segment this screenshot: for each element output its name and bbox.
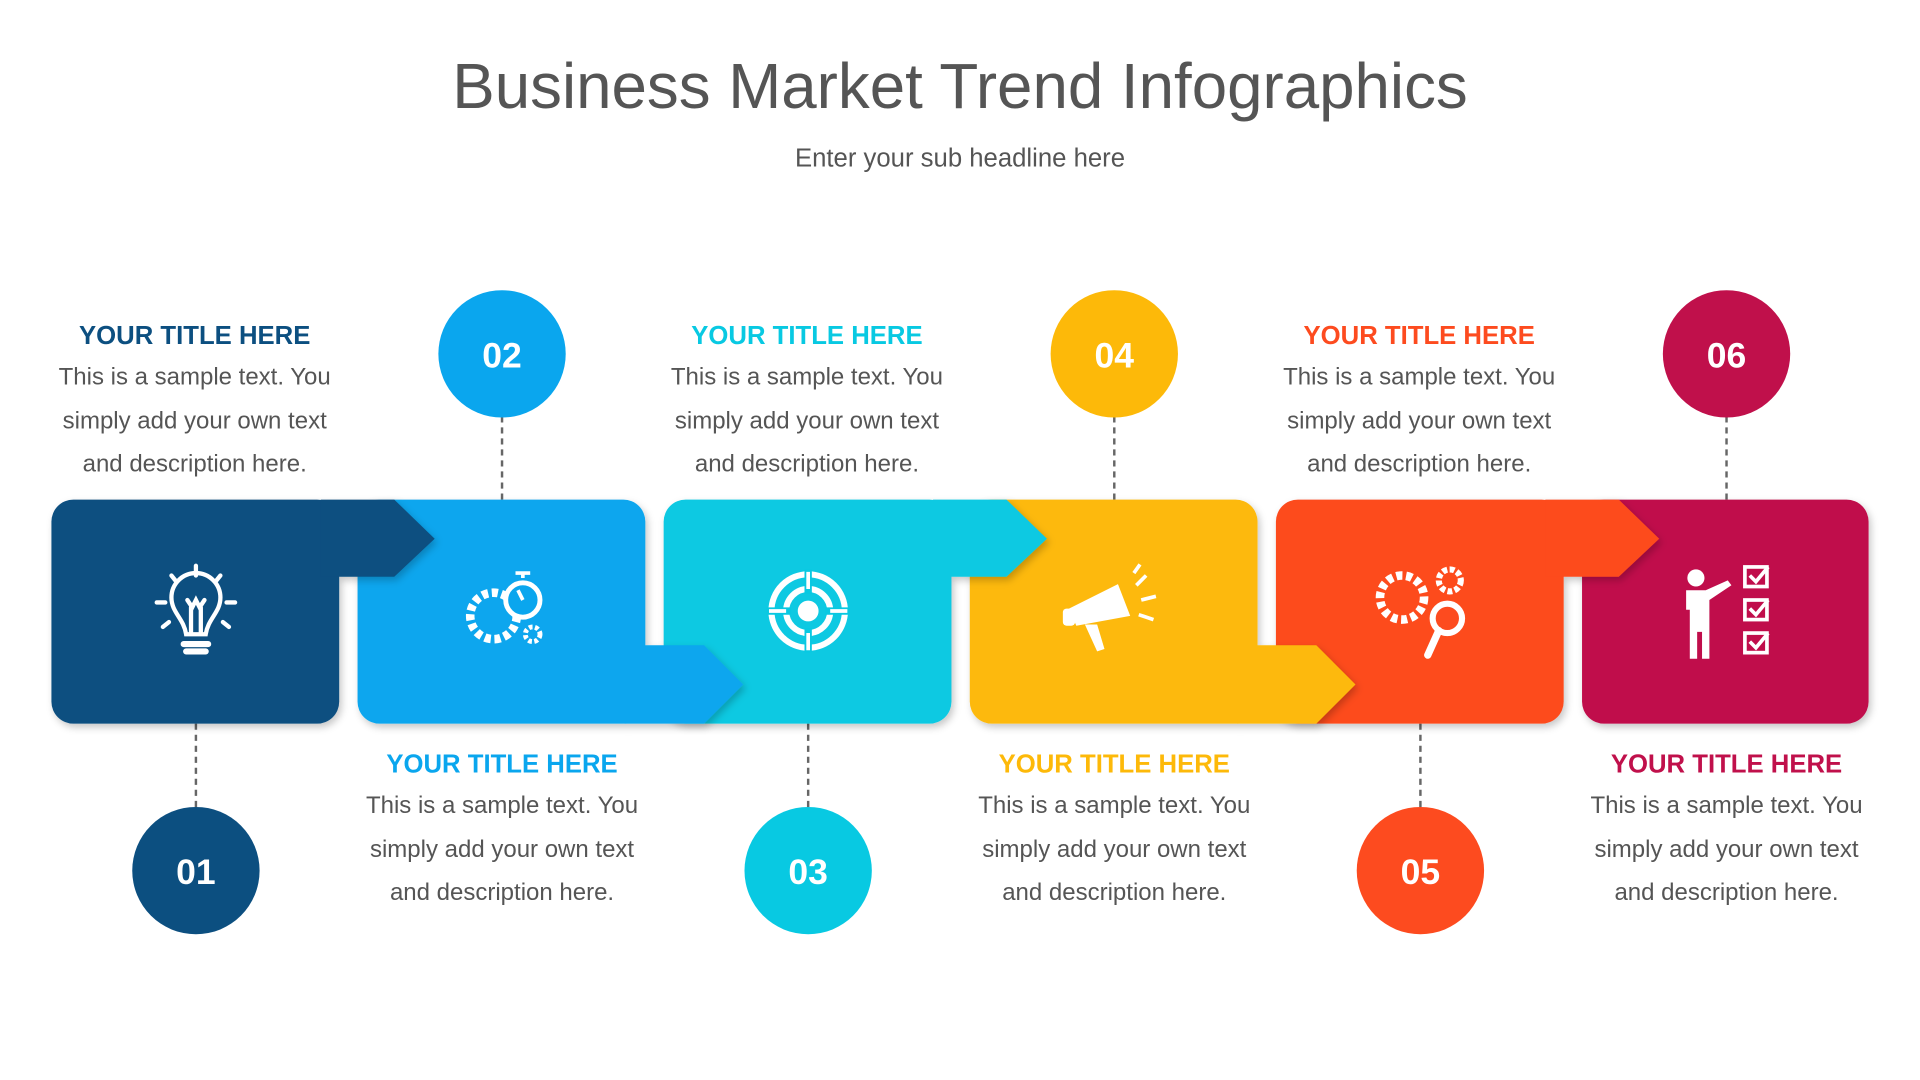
text block 5: and description here. [1307, 450, 1531, 477]
box 2 [358, 500, 743, 724]
text block 2: YOUR TITLE HERE [386, 751, 618, 779]
circle 04: 04 [1095, 335, 1134, 375]
text block 4: YOUR TITLE HERE [999, 751, 1230, 779]
box 1 [51, 500, 435, 724]
box 6 [1582, 500, 1869, 724]
text block 5 [1283, 322, 1555, 477]
circle 06: 06 [1707, 335, 1746, 375]
text block 3: simply add your own text [675, 408, 939, 435]
icon: gears stopwatch [470, 573, 540, 642]
text block 2: simply add your own text [370, 836, 634, 863]
text block 3: This is a sample text. You [671, 363, 943, 390]
box 4 [970, 500, 1356, 724]
text block 3 [671, 322, 943, 477]
icon: gears magnifier [1380, 569, 1462, 655]
text block 3: YOUR TITLE HERE [691, 322, 923, 350]
icon: person checklist [1686, 567, 1768, 659]
icon: light bulb [157, 566, 235, 651]
text block 6: and description here. [1614, 879, 1839, 906]
icon: megaphone [1063, 564, 1156, 651]
text block 3: and description here. [695, 450, 919, 477]
text block 5: simply add your own text [1287, 408, 1552, 435]
circle 02: 02 [482, 335, 522, 375]
circle 04 [1051, 290, 1178, 418]
text block 4: This is a sample text. You [978, 792, 1250, 819]
box 3 [664, 500, 1047, 724]
text block 4: and description here. [1002, 879, 1226, 906]
circle 03 [744, 807, 872, 934]
circle 01 [132, 807, 260, 934]
text block 2 [366, 751, 638, 906]
circle 03: 03 [788, 852, 828, 892]
text block 1: and description here. [83, 450, 307, 477]
text block 4: simply add your own text [982, 836, 1247, 863]
text block 5: This is a sample text. You [1283, 363, 1555, 390]
text block 2: and description here. [390, 879, 614, 906]
circle 05 [1357, 807, 1484, 934]
text block 1: This is a sample text. You [59, 363, 331, 390]
text block 6: simply add your own text [1594, 836, 1859, 863]
text block 5: YOUR TITLE HERE [1304, 322, 1535, 350]
icon: target [767, 569, 850, 653]
text block 1 [59, 322, 331, 477]
circle 01: 01 [176, 852, 216, 892]
text block 1: simply add your own text [63, 408, 327, 435]
circle 02 [438, 290, 566, 418]
circle 06 [1663, 290, 1790, 418]
circle 05: 05 [1401, 852, 1440, 892]
text block 1: YOUR TITLE HERE [79, 322, 310, 350]
text block 6 [1590, 751, 1863, 906]
text block 6: YOUR TITLE HERE [1611, 751, 1842, 779]
dashed connectors [196, 416, 1727, 808]
subtitle: Enter your sub headline here [795, 145, 1125, 173]
text block 4 [978, 751, 1250, 906]
text block 6: This is a sample text. You [1590, 792, 1863, 819]
text block 2: This is a sample text. You [366, 792, 638, 819]
title: Business Market Trend Infographics [452, 51, 1468, 122]
box 5 [1276, 500, 1659, 724]
